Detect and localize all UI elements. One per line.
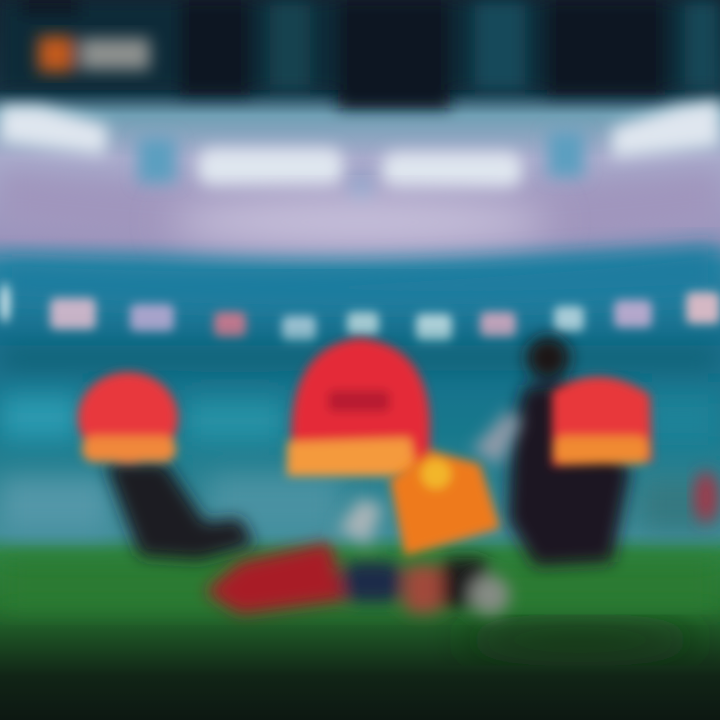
stadium lights band: [0, 100, 720, 188]
red spectator far right: [694, 471, 718, 523]
central red dome: [287, 338, 430, 476]
right red headrest: [552, 377, 652, 466]
raised arm: [472, 410, 522, 465]
row of flags: [0, 283, 720, 342]
left red headrest: [78, 372, 178, 464]
grass: [0, 560, 720, 610]
right figure and chair: [508, 336, 630, 566]
reclining figure legs: [205, 498, 510, 615]
lower stand glow: [170, 196, 550, 248]
logo: [38, 36, 150, 72]
crowd: [0, 345, 720, 535]
roof structure: [0, 0, 720, 108]
left chair: [105, 462, 255, 560]
orange vest: [390, 450, 500, 556]
shadow under figures: [460, 626, 700, 654]
lavender upper stand: [0, 170, 720, 248]
blue light accents: [138, 132, 584, 202]
teal ring: [0, 245, 720, 305]
